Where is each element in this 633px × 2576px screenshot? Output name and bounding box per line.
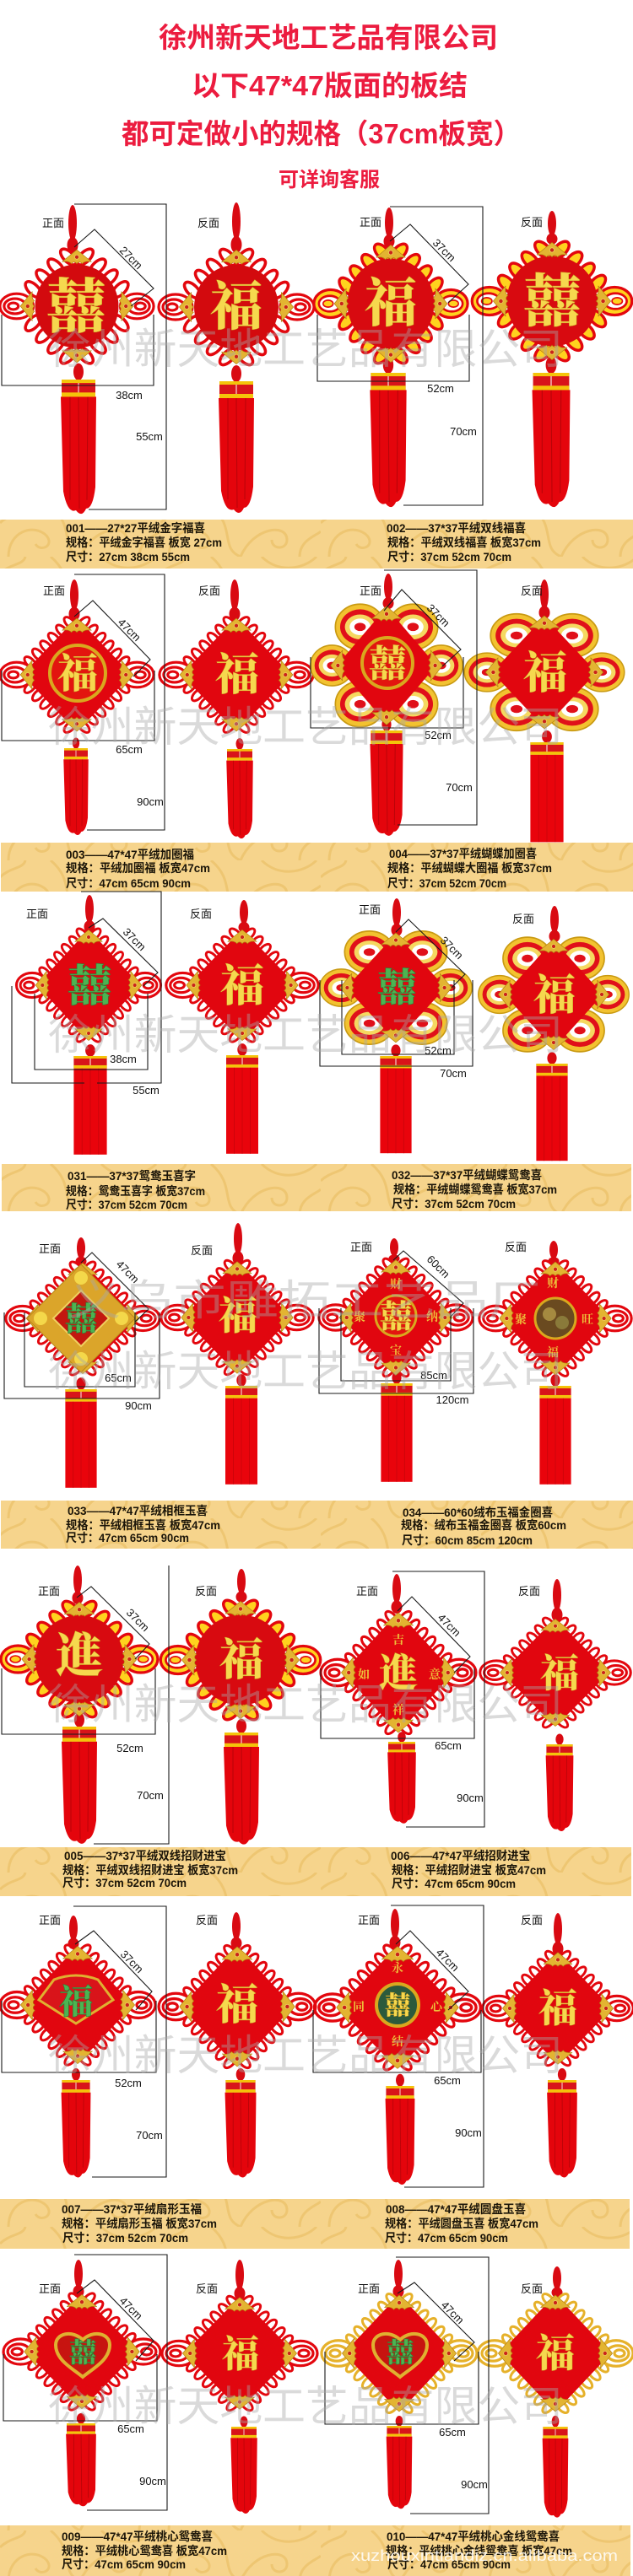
- labels row 4: 反面: [505, 1241, 527, 1253]
- labels row 3: 70cm: [440, 1067, 467, 1080]
- dimension lines 007: [2, 1906, 166, 2177]
- banner: 尺寸：37cm 52cm 70cm: [392, 1197, 516, 1210]
- ornament: 010 front: 囍: [387, 2331, 414, 2370]
- labels row 7: 47cm: [117, 2294, 145, 2322]
- labels row 6: 70cm: [136, 2129, 163, 2142]
- banner: [0, 1847, 631, 1896]
- ornament: 031 front: [16, 895, 161, 1155]
- labels row 7: 90cm: [139, 2475, 166, 2487]
- banner: 001——27*27平绒金字福喜: [66, 521, 205, 535]
- dimension lines 008: [313, 1905, 484, 2187]
- watermark: 徐州新天地工艺品有限公司: [48, 1681, 563, 1728]
- dimension lines 002: [317, 207, 483, 505]
- watermark: upper: 义乌市雕拓工艺品厂: [68, 1277, 541, 1324]
- ornament: 010 front: [322, 2260, 477, 2509]
- labels row 6: 37cm: [118, 1948, 146, 1975]
- labels row 7: 65cm: [117, 2422, 144, 2435]
- labels row 1: 70cm: [450, 425, 477, 438]
- labels row 6: 正面: [39, 1914, 61, 1927]
- banner: 尺寸：37cm 52cm 70cm: [62, 2231, 188, 2245]
- labels row 5: 37cm: [124, 1606, 152, 1634]
- ornament: 005 back: 福: [219, 1625, 263, 1688]
- ornament: 004 front: [311, 574, 463, 836]
- ornament: 032 back: 福: [533, 962, 576, 1022]
- labels row 7: 正面: [358, 2282, 380, 2295]
- labels row 5: 正面: [38, 1585, 60, 1598]
- banner: 尺寸：47cm 65cm 90cm: [66, 876, 191, 890]
- banner: 005——37*37平绒双线招财进宝: [64, 1849, 226, 1862]
- banner: 009——47*47平绒桃心鸳鸯喜: [62, 2530, 213, 2543]
- watermark: 徐州新天地工艺品有限公司: [48, 2032, 563, 2079]
- labels row 4: 85cm: [420, 1369, 447, 1382]
- ornament: 006 front: 祥: [392, 1701, 404, 1718]
- labels row 5: 正面: [356, 1585, 378, 1598]
- labels row 5: 70cm: [137, 1789, 164, 1802]
- watermark: 徐州新天地工艺品有限公司: [48, 1348, 563, 1395]
- labels row 1: 反面: [197, 217, 219, 229]
- labels row 4: 65cm: [105, 1372, 132, 1384]
- labels row 3: 38cm: [110, 1053, 137, 1065]
- ornament: 033 back: [161, 1223, 313, 1485]
- ornament: 010 back: 福: [536, 2323, 575, 2379]
- watermark: 徐州新天地工艺品有限公司: [48, 326, 563, 373]
- labels row 3: 37cm: [438, 934, 466, 962]
- ornament: 008 front: 同: [353, 1998, 365, 2015]
- banner: 规格：绒布玉福金圈喜 板宽60cm: [401, 1518, 566, 1532]
- ornament: 009 front: 囍: [69, 2331, 96, 2370]
- banner: 规格：平绒双线招财进宝 板宽37cm: [62, 1863, 238, 1877]
- labels row 5: 47cm: [436, 1611, 463, 1639]
- labels row 4: 正面: [350, 1241, 372, 1253]
- labels row 6: 反面: [196, 1914, 218, 1927]
- ornament: 034 front: 宝: [390, 1342, 402, 1359]
- ornament: 006 front: 意: [429, 1666, 441, 1683]
- banner: 尺寸：37cm 52cm 70cm: [62, 1876, 187, 1889]
- dimension lines 033: [4, 1253, 160, 1398]
- labels row 3: 55cm: [133, 1084, 160, 1097]
- ornament: 032 front: 囍: [377, 957, 416, 1013]
- ornament: 034 front: 纳: [426, 1308, 438, 1325]
- labels row 5: 90cm: [457, 1792, 484, 1804]
- labels row 2: 反面: [521, 585, 543, 597]
- banner: 007——37*37平绒扇形玉福: [62, 2202, 202, 2216]
- banner: 规格：平绒扇形玉福 板宽37cm: [62, 2217, 217, 2230]
- dimension lines 006: [321, 1571, 484, 1827]
- banner: 规格：平绒招财进宝 板宽47cm: [392, 1863, 546, 1877]
- ornament: 009 back: 福: [222, 2324, 259, 2378]
- title: 徐州新天地工艺品有限公司: [159, 22, 498, 53]
- ornament: 008 front: 囍: [385, 1985, 410, 2022]
- ornament: 008 back: [483, 1913, 633, 2177]
- labels row 5: 反面: [518, 1585, 540, 1598]
- labels row 6: 正面: [358, 1914, 380, 1927]
- ornament: 006 front: [321, 1574, 476, 1824]
- panel: row 031 032: [2, 892, 631, 1211]
- labels row 3: 正面: [359, 903, 381, 916]
- labels row 1: 正面: [360, 216, 381, 229]
- watermark: 徐州新天地工艺品有限公司: [48, 1011, 563, 1059]
- ornament: 002 back: 囍: [523, 256, 581, 338]
- labels row 2: 65cm: [116, 743, 143, 756]
- panel: row 005 006: [0, 1566, 631, 1896]
- ornament: 033 front: [6, 1237, 160, 1488]
- labels row 5: 65cm: [435, 1739, 462, 1752]
- labels row 3: 反面: [190, 908, 212, 920]
- labels row 2: 正面: [43, 585, 65, 597]
- labels row 6: [39, 1914, 543, 2142]
- ornament: 034 front: 囍: [380, 1291, 412, 1337]
- panel: row 001 002: [0, 202, 633, 569]
- ornament: 002 back: [472, 211, 632, 507]
- ornament: 009 back: [162, 2260, 317, 2514]
- labels row 1: 55cm: [136, 430, 163, 443]
- banner: 尺寸：47cm 65cm 90cm: [387, 2557, 511, 2571]
- labels row 7: 正面: [39, 2282, 61, 2295]
- labels row 1: [42, 216, 543, 443]
- watermark: 徐州新天地工艺品有限公司: [48, 2383, 563, 2430]
- labels row 4: 60cm: [425, 1253, 452, 1280]
- labels row 2: [43, 585, 543, 808]
- labels row 1: 52cm: [427, 382, 454, 395]
- labels row 5: 反面: [195, 1585, 217, 1598]
- ornament: 003 front: [0, 579, 154, 835]
- ornament: 007 back: 福: [216, 1971, 258, 2032]
- banner: 010——47*47平绒桃心金线鸳鸯喜: [387, 2530, 560, 2543]
- labels row 6: 90cm: [455, 2126, 482, 2139]
- labels row 7: 90cm: [461, 2478, 488, 2491]
- banner: [0, 2525, 630, 2576]
- banner: [2, 1164, 631, 1211]
- title: 可详询客服: [279, 168, 380, 191]
- panel: row 009 010: [0, 2255, 633, 2576]
- ornament: 006 back: [480, 1579, 630, 1831]
- banner: 规格：平绒加圈福 板宽47cm: [66, 861, 210, 875]
- ornament: 007 front: [0, 1916, 155, 2177]
- labels row 3: 37cm: [121, 925, 149, 953]
- labels row 6: 反面: [521, 1914, 543, 1927]
- banner: 002——37*37平绒双线福喜: [387, 521, 526, 535]
- banner: 004——37*37平绒蝴蝶加圈喜: [389, 847, 537, 860]
- banner: 规格：平绒相框玉喜 板宽47cm: [66, 1518, 220, 1532]
- labels row 5: 52cm: [116, 1742, 143, 1754]
- labels row 7: 反面: [196, 2282, 218, 2295]
- labels row 4: [39, 1241, 527, 1412]
- labels row 2: 52cm: [425, 729, 452, 741]
- title: 都可定做小的规格（37cm板宽）: [122, 118, 521, 149]
- ornament: 006 back: 福: [540, 1643, 579, 1699]
- ornament: 034 back: 聚: [515, 1311, 527, 1328]
- ornament: 034 front: 聚: [354, 1308, 365, 1325]
- banner: [0, 520, 633, 569]
- dimension lines 001: [2, 204, 166, 509]
- title: 以下47*47版面的板结: [192, 70, 468, 101]
- labels row 3: [26, 903, 534, 1097]
- banner: 尺寸：47cm 65cm 90cm: [392, 1877, 516, 1890]
- panel: row 007 008: [0, 1905, 633, 2249]
- ornament: 004 back: [464, 579, 625, 842]
- banner: 033——47*47平绒相框玉喜: [68, 1504, 208, 1517]
- ornament: 004 front: 囍: [369, 633, 406, 687]
- ornament: 032 back: [479, 906, 629, 1161]
- banner: [1, 843, 633, 892]
- ornament: 001 back: [159, 202, 314, 513]
- dimension lines 031: [12, 892, 161, 1083]
- banner: 规格：平绒圆盘玉喜 板宽47cm: [385, 2217, 538, 2230]
- ornament: 034 back: [479, 1241, 631, 1485]
- dimension lines 003: [2, 574, 165, 830]
- labels row 2: 70cm: [446, 781, 473, 794]
- labels row 6: 47cm: [434, 1946, 462, 1974]
- ornament: 005 front: [1, 1566, 158, 1844]
- banner: 规格：平绒桃心鸳鸯喜 板宽47cm: [62, 2544, 227, 2557]
- ornament: 007 back: [159, 1912, 316, 2177]
- ornament: 003 back: 福: [215, 639, 259, 703]
- labels row 2: 反面: [198, 585, 220, 597]
- banner: 尺寸：47cm 65cm 90cm: [66, 1531, 189, 1544]
- dimension lines 034: [319, 1251, 473, 1393]
- ornament: 034 front: 财: [390, 1275, 402, 1292]
- banner: 尺寸：47cm 65cm 90cm: [62, 2557, 186, 2571]
- labels row 2: 90cm: [137, 795, 164, 808]
- ornament: 001 front: [0, 205, 154, 514]
- dimension lines 032: [320, 919, 473, 1066]
- banner: 尺寸：37cm 52cm 70cm: [387, 876, 506, 890]
- labels row 4: 反面: [191, 1244, 213, 1257]
- ornament: 007 front: 福: [59, 1975, 93, 2024]
- labels row 6: 52cm: [115, 2077, 142, 2089]
- banner: 032——37*37平绒蝴蝶鸳鸯喜: [392, 1168, 542, 1182]
- ornament: 032 front: [320, 898, 472, 1153]
- ornament: 031 front: 囍: [68, 951, 111, 1014]
- ornament: 008 front: [315, 1909, 480, 2185]
- ornament: 034 back: 旺: [582, 1311, 593, 1328]
- labels row 3: 反面: [512, 913, 534, 925]
- watermark: 徐州新天地工艺品有限公司: [48, 703, 563, 751]
- ornament: 034 back: 财: [547, 1275, 559, 1291]
- ornament: 031 back: 福: [220, 951, 264, 1014]
- labels row 4: 120cm: [436, 1393, 469, 1406]
- banner: [1, 1501, 633, 1549]
- ornament: 034 front: [319, 1238, 473, 1482]
- ornament: 004 back: 福: [523, 638, 567, 701]
- ornament: 006 front: 進: [379, 1642, 418, 1698]
- banner: 规格：平绒蝴蝶大圈福 板宽37cm: [387, 861, 552, 875]
- ornament: 002 front: 福: [365, 261, 417, 337]
- labels row 2: 正面: [360, 585, 381, 597]
- banner: 尺寸：47cm 65cm 90cm: [385, 2231, 508, 2245]
- labels row 7: 47cm: [439, 2298, 467, 2326]
- banner: 031——37*37鸳鸯玉喜字: [68, 1169, 196, 1183]
- banner: 尺寸：27cm 38cm 55cm: [66, 550, 190, 563]
- panel: row 003 004: [0, 570, 633, 892]
- title: [122, 22, 521, 191]
- banner: 003——47*47平绒加圈福: [66, 848, 194, 861]
- ornament: 009 front: [3, 2260, 160, 2506]
- labels row 7: 反面: [521, 2282, 543, 2295]
- labels row 3: 52cm: [425, 1044, 452, 1057]
- ornament: 034 back: 福: [547, 1344, 559, 1361]
- watermark: site url: xuzhouxintiandiz.cn.alibaba.com: [351, 2547, 618, 2564]
- banner: 规格：平绒双线福喜 板宽37cm: [387, 536, 541, 549]
- ornament: 008 front: 结: [392, 2033, 403, 2050]
- ornament: 033 back: 福: [219, 1285, 257, 1341]
- dimension lines 010: [325, 2257, 489, 2514]
- labels row 1: 38cm: [116, 389, 143, 401]
- ornament: 010 back: [478, 2266, 633, 2518]
- ornament: 001 back: 福: [210, 265, 262, 340]
- ornament: 031 back: [166, 900, 318, 1154]
- dimension lines 009: [3, 2255, 167, 2510]
- ornament: 008 back: 福: [538, 1978, 577, 2034]
- labels row 2: 47cm: [116, 616, 143, 644]
- labels row 1: 37cm: [430, 236, 458, 264]
- banner: [0, 2199, 630, 2249]
- labels row 1: 正面: [42, 217, 64, 229]
- banner: 尺寸：37cm 52cm 70cm: [66, 1198, 187, 1211]
- panel: row 033 034: [1, 1223, 633, 1549]
- banner: 尺寸：60cm 85cm 120cm: [402, 1533, 533, 1547]
- banner: 规格：平绒金字福喜 板宽 27cm: [66, 536, 222, 549]
- labels row 1: 反面: [521, 216, 543, 229]
- ornament: 033 front: 囍: [65, 1293, 97, 1339]
- banner: 规格：平绒桃心金线鸳鸯喜 板宽47cm: [386, 2544, 572, 2557]
- labels row 7: [39, 2282, 543, 2491]
- ornament: 003 front: 福: [57, 641, 98, 699]
- labels row 2: 37cm: [425, 601, 452, 629]
- ornament: 008 front: 心: [430, 1998, 444, 2015]
- banner: 规格：平绒蝴蝶鸳鸯喜 板宽37cm: [393, 1183, 557, 1196]
- labels row 4: 正面: [39, 1242, 61, 1255]
- banner: 034——60*60绒布玉福金圈喜: [403, 1506, 553, 1519]
- labels row 1: 27cm: [117, 244, 145, 272]
- banner: 008——47*47平绒圆盘玉喜: [386, 2202, 526, 2216]
- banner: 006——47*47平绒招财进宝: [391, 1849, 530, 1862]
- ornament: 005 front: 進: [56, 1619, 103, 1686]
- labels row 6: 65cm: [434, 2074, 461, 2087]
- ornament: 008 front: 永: [392, 1959, 403, 1976]
- labels row 4: 90cm: [125, 1399, 152, 1412]
- ornament: 006 front: 如: [358, 1666, 370, 1683]
- ornament: 005 back: [160, 1569, 321, 1845]
- ornament: 006 front: 吉: [392, 1631, 404, 1648]
- dimension lines 004: [311, 570, 477, 825]
- labels row 5: [38, 1585, 540, 1804]
- banner: 尺寸：37cm 52cm 70cm: [387, 550, 511, 563]
- labels row 7: 65cm: [439, 2426, 466, 2439]
- ornament: 001 front: 囍: [46, 260, 106, 345]
- ornament: 003 back: [160, 579, 313, 838]
- ornament: 002 front: [314, 207, 468, 507]
- dimension lines 005: [2, 1566, 169, 1844]
- labels row 4: 47cm: [114, 1258, 142, 1285]
- banner: 规格：鸳鸯玉喜字 板宽37cm: [66, 1184, 205, 1198]
- labels row 3: 正面: [26, 908, 48, 920]
